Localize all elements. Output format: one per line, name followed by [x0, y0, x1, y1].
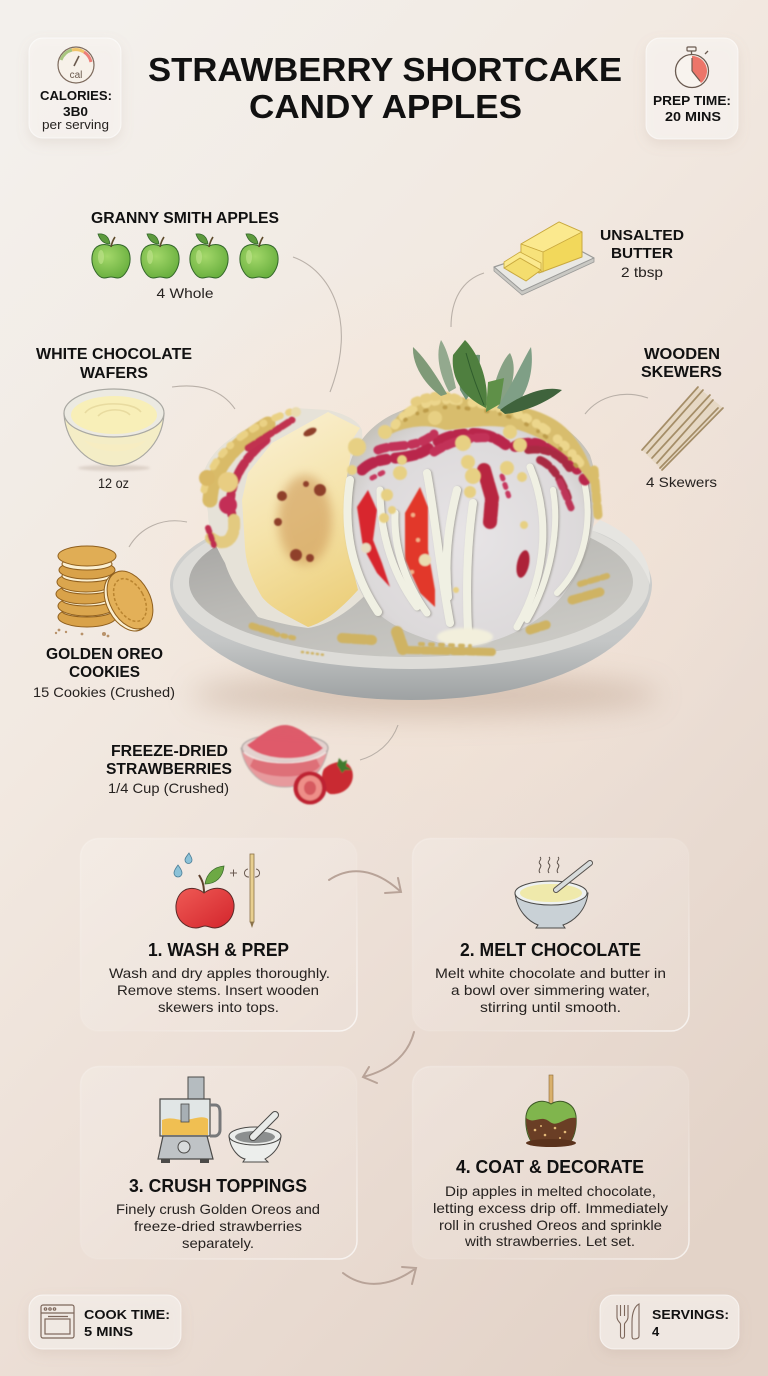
- icon: green apples: [92, 234, 278, 278]
- prep time text: [653, 93, 731, 124]
- ingredient: white chocolate wafers: 12 oz: [98, 475, 129, 491]
- panel: servings: [600, 1295, 739, 1349]
- step 2 heading: 2. MELT CHOCOLATE: [460, 940, 641, 960]
- icon: butter on dish: [494, 222, 594, 295]
- right chocolate coated fruit: [344, 394, 598, 648]
- panel: step 3 crush toppings: [80, 1066, 357, 1259]
- left apple half: [199, 407, 370, 628]
- ingredient: golden oreo cookies: 15 Cookies (Crushed): [33, 684, 175, 700]
- step 4 text: Dip apples in melted chocolate,: [445, 1183, 656, 1199]
- ingredient: wooden skewers: 4 Skewers: [646, 474, 717, 490]
- panel: prep time: [646, 38, 738, 139]
- ingredient leader lines: [129, 257, 648, 760]
- ingredient: granny smith apples: GRANNY SMITH APPLES: [91, 210, 279, 227]
- ingredient: unsalted butter: [494, 222, 684, 295]
- panel: step 4 coat and decorate: [412, 1066, 689, 1259]
- ingredient: wooden skewers: [641, 346, 723, 490]
- ingredient: white chocolate wafers: [36, 346, 192, 491]
- ingredient: golden oreo cookies: COOKIES: [69, 664, 140, 681]
- ingredient: freeze-dried strawberries: STRAWBERRIES: [106, 761, 232, 778]
- icon: apple, water drops and skewer: [174, 853, 260, 928]
- step 3 text: [116, 1201, 320, 1251]
- step 1 text: [109, 965, 330, 1015]
- step 2 text: [435, 965, 666, 1015]
- step 3 heading: 3. CRUSH TOPPINGS: [129, 1176, 307, 1196]
- step 2 text: stirring until smooth.: [480, 999, 621, 1015]
- title: CANDY APPLES: [249, 89, 522, 126]
- icon: calorie gauge: cal: [70, 70, 82, 81]
- ingredient: granny smith apples: [91, 210, 279, 301]
- calories text: CALORIES:: [40, 88, 112, 103]
- icon: food processor and mortar: [158, 1077, 281, 1163]
- crushed cookie topping: [347, 394, 598, 593]
- arrow: step 1 to step 2: [329, 871, 401, 893]
- icon: chocolate coated candy apple: [526, 1075, 576, 1147]
- arrow: step 2 to step 3: [363, 1032, 414, 1083]
- calories text: 3B0: [63, 104, 88, 119]
- arrow: step 3 to step 4: [343, 1267, 416, 1284]
- panel: step 1 wash and prep: [80, 838, 357, 1031]
- icon: fork and knife: [617, 1304, 639, 1339]
- icon: strawberry powder bowl: [241, 725, 328, 787]
- white drips: [347, 467, 588, 632]
- step 2 text: a bowl over simmering water,: [451, 982, 650, 998]
- step 3 text: Finely crush Golden Oreos and: [116, 1201, 320, 1217]
- icon: bowl with steam and spoon: [515, 857, 590, 928]
- ingredient: golden oreo cookies: [33, 546, 175, 700]
- icon: skewers: [642, 387, 723, 470]
- step 1 text: Wash and dry apples thoroughly.: [109, 965, 330, 981]
- panel: cook time: [29, 1295, 181, 1349]
- title: [148, 52, 622, 126]
- prep time text: 20 MINS: [665, 109, 721, 124]
- calories text: [40, 88, 112, 132]
- ingredient: freeze-dried strawberries: [106, 725, 353, 804]
- ingredient: wooden skewers: WOODEN: [644, 346, 720, 363]
- ingredient: unsalted butter: BUTTER: [611, 245, 673, 262]
- ingredient: granny smith apples: 4 Whole: [156, 285, 214, 301]
- cook time text: COOK TIME:: [84, 1307, 170, 1322]
- title: STRAWBERRY SHORTCAKE: [148, 52, 622, 89]
- ingredient: golden oreo cookies: GOLDEN OREO: [46, 646, 163, 663]
- calories text: per serving: [42, 117, 109, 132]
- step 2 text: Melt white chocolate and butter in: [435, 965, 666, 981]
- ingredient: unsalted butter: 2 tbsp: [621, 264, 663, 280]
- plate shadow: [190, 673, 660, 717]
- puddle at base: [437, 628, 493, 646]
- step 3 text: freeze-dried strawberries: [134, 1218, 302, 1234]
- plate: [170, 501, 652, 700]
- servings text: [652, 1307, 729, 1339]
- hero photo: dessert on plate: [170, 340, 660, 717]
- servings text: 4: [652, 1324, 660, 1339]
- panel: step 2 melt chocolate: [412, 838, 689, 1031]
- leaves on top: [413, 340, 562, 414]
- icon: bowl of melted chocolate: [64, 389, 164, 471]
- step 1 heading: 1. WASH & PREP: [148, 940, 289, 960]
- cook time text: 5 MINS: [84, 1324, 133, 1339]
- ingredient: freeze-dried strawberries: FREEZE-DRIED: [111, 743, 228, 760]
- cook time text: [84, 1307, 170, 1339]
- panel: calories: [29, 38, 121, 138]
- prep time text: PREP TIME:: [653, 93, 731, 108]
- step 1 text: skewers into tops.: [158, 999, 279, 1015]
- ingredient: white chocolate wafers: WAFERS: [80, 365, 148, 382]
- ingredient: unsalted butter: UNSALTED: [600, 227, 684, 244]
- ingredient: freeze-dried strawberries: 1/4 Cup (Crushed): [108, 780, 229, 796]
- icon: strawberries: [294, 758, 353, 804]
- icon: stopwatch: [676, 47, 708, 88]
- step 3 text: separately.: [182, 1235, 254, 1251]
- step 4 text: roll in crushed Oreos and sprinkle: [439, 1217, 662, 1233]
- crumbs on plate: [252, 576, 607, 655]
- step 4 heading: 4. COAT & DECORATE: [456, 1157, 644, 1177]
- ingredient: wooden skewers: SKEWERS: [641, 364, 722, 381]
- ingredient: white chocolate wafers: WHITE CHOCOLATE: [36, 346, 192, 363]
- step 4 text: with strawberries. Let set.: [464, 1233, 635, 1249]
- step 4 text: [433, 1183, 668, 1249]
- icon: cookie stack: [56, 546, 162, 639]
- red fruit windows: [357, 487, 532, 607]
- crushed strawberry topping: [362, 433, 585, 522]
- cookie crumbs: [55, 629, 109, 637]
- step 4 text: letting excess drip off. Immediately: [433, 1200, 668, 1216]
- icon: oven: [41, 1305, 74, 1338]
- step 1 text: Remove stems. Insert wooden: [117, 982, 319, 998]
- servings text: SERVINGS:: [652, 1307, 729, 1322]
